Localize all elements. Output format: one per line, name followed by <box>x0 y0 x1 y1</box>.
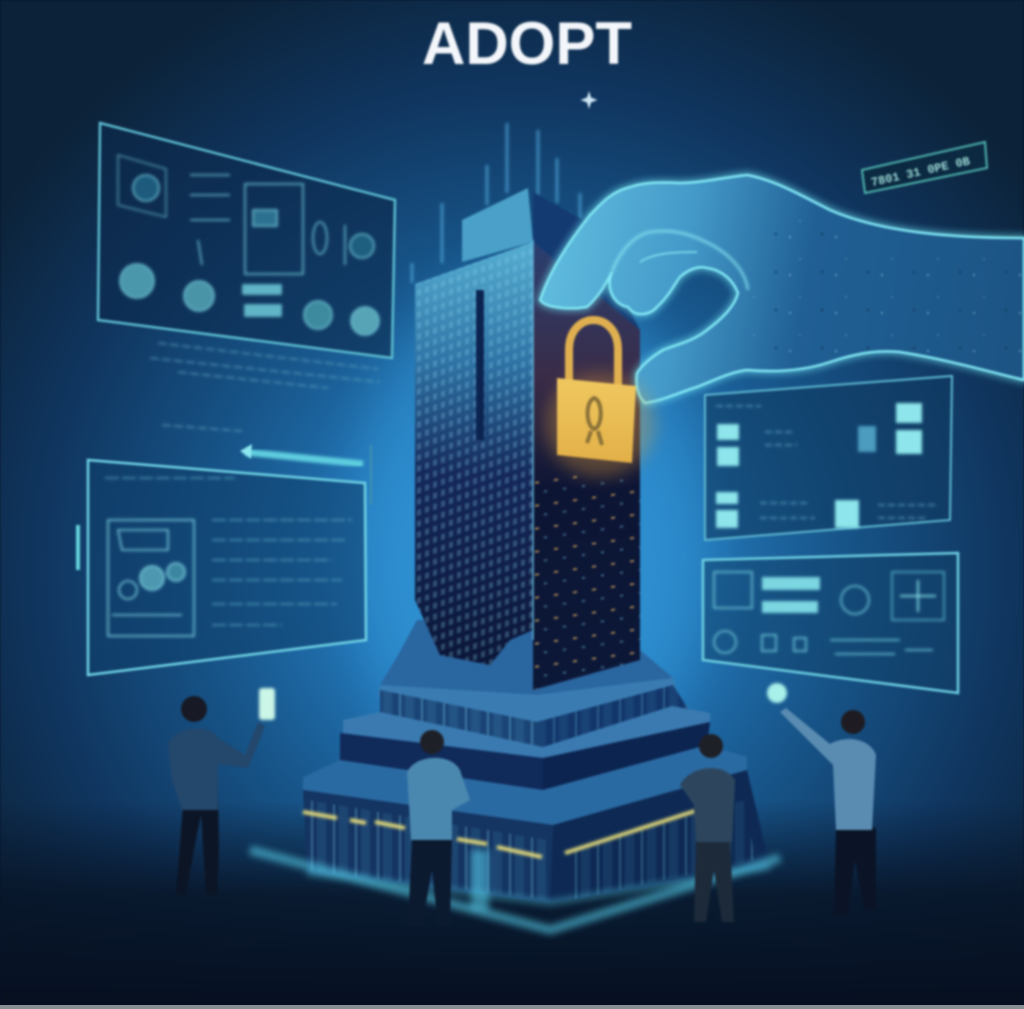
tower base <box>303 678 770 903</box>
bottom edge line <box>0 1005 1024 1009</box>
panel: lower left screen <box>78 460 366 675</box>
panel: lower right screen <box>703 553 958 693</box>
title: ADOPT <box>422 10 632 77</box>
arrow <box>240 444 371 505</box>
person: centre left <box>407 730 470 926</box>
text lines <box>105 478 352 625</box>
person: centre right <box>680 734 735 922</box>
hand <box>540 175 1024 403</box>
icon: star <box>580 91 598 109</box>
upper block <box>462 188 533 262</box>
tiles <box>716 403 922 528</box>
ground glow <box>250 850 780 930</box>
text block under upper left screen <box>150 343 380 431</box>
right face <box>533 242 640 690</box>
left face <box>415 242 533 665</box>
small tag: 7801 31 0PE 0B <box>870 154 971 190</box>
panel: upper left screen <box>98 123 395 358</box>
tiles and icons <box>714 572 944 654</box>
icon: golden padlock <box>545 320 655 477</box>
person: far left with phone <box>168 688 275 895</box>
text lines <box>716 406 938 518</box>
antennas <box>412 123 580 283</box>
diagram <box>108 520 194 636</box>
diagram icons <box>118 155 379 335</box>
panel: upper right screen <box>705 376 952 540</box>
tower <box>380 123 673 695</box>
person: far right with device <box>767 683 876 915</box>
yellow light strips <box>303 811 695 857</box>
small tag <box>862 142 987 193</box>
foothills behind tower <box>380 620 673 695</box>
tower glow <box>350 270 710 810</box>
